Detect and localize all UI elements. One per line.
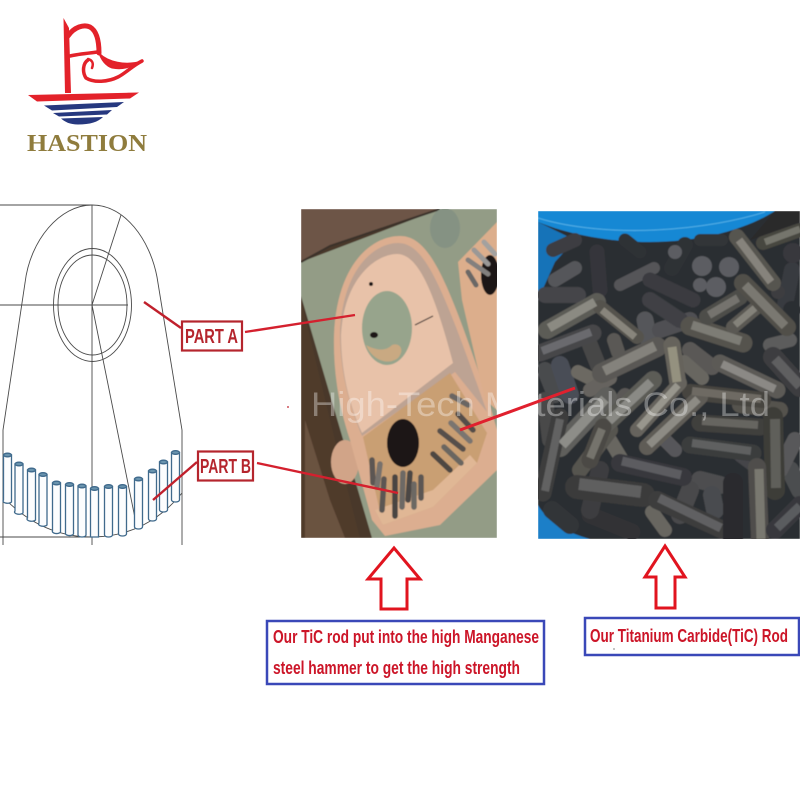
casting background [301,218,416,538]
part A cavity [341,254,453,433]
logo red deck [28,92,139,102]
logo mast and flag [64,18,142,93]
centre lines [0,205,137,545]
front row rods [540,230,800,539]
photo: pile of TiC rods in blue bucket [538,211,800,539]
logo: Hastion ship [27,18,148,157]
neighbouring hammer [458,222,497,410]
label: Part B [198,452,253,480]
logo wordmark: HASTION [27,131,148,157]
technical drawing of hammer [0,205,182,545]
watermark: High-Tech Materials Co., Ltd [311,386,770,424]
photo: hammer casting with rods [301,208,499,538]
part B pocket [363,373,487,508]
rods in pocket [372,396,473,516]
green steel plate [301,209,497,538]
arrow: up to rods photo [645,546,685,608]
rod lit faces [542,229,800,539]
stray dot [287,406,289,408]
recess rim [334,236,497,536]
shaft hole [362,291,412,365]
caption: hammer [267,621,544,684]
label: Part B: PART B [200,456,251,478]
caption: rod [585,618,799,655]
label: Part A [182,322,242,350]
rod end caps [668,243,800,319]
dark bucket interior [538,211,800,539]
logo blue waves [44,102,124,124]
bore circles [54,248,132,362]
blue bucket side [538,222,567,292]
label: Part A: PART A [185,326,238,348]
hammer outline [3,205,182,545]
embedded TiC rods [3,451,179,537]
caption: hammer: steel hammer to get the high strength [273,658,520,678]
leader lines [144,302,575,500]
back row rods [545,240,800,532]
blue bucket rim [538,211,775,242]
caption: hammer: Our TiC rod put into the high Manganese [273,627,539,647]
arrow: up to hammer photo [368,548,420,609]
